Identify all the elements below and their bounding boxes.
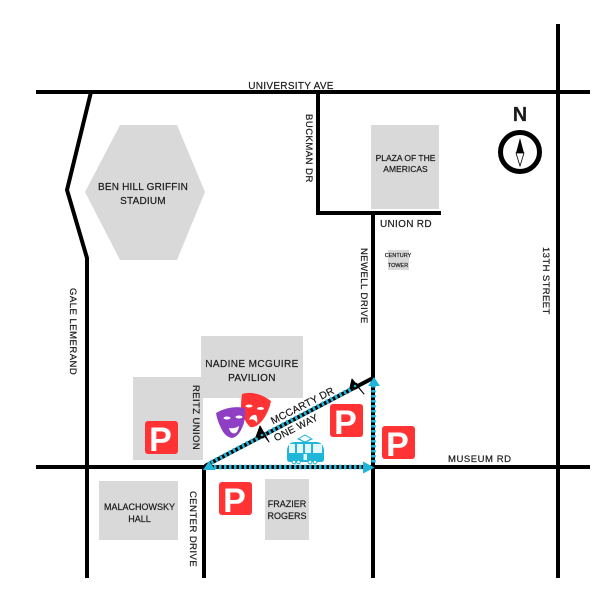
road labels	[67, 81, 551, 567]
red mask	[241, 393, 271, 427]
icon: compass: N	[513, 104, 527, 126]
icon: parking Reitz	[145, 421, 178, 459]
icon: parking Reitz: P	[149, 421, 172, 459]
icon: trolley	[287, 435, 324, 464]
road labels: 13TH STREET	[540, 247, 551, 315]
icon: theatre masks	[216, 393, 271, 438]
building: Century Tower: CENTURY	[385, 253, 412, 259]
icon: parking east: P	[386, 426, 409, 464]
building: Frazier Rogers	[265, 479, 309, 540]
road labels: CENTER DRIVE	[187, 491, 198, 567]
building: Nadine McGuire Pavilion: PAVILION	[228, 373, 276, 384]
shuttle route: dotted blue triangle	[211, 385, 374, 467]
icon: parking center: P	[334, 404, 357, 442]
icon: compass	[500, 104, 540, 172]
icon: parking east	[382, 426, 415, 464]
road labels: NEWELL DRIVE	[358, 248, 369, 324]
building: Century Tower	[385, 250, 412, 270]
road labels: MUSEUM RD	[448, 454, 512, 465]
building: Plaza of the Americas: PLAZA OF THE	[376, 153, 436, 163]
icon: parking south: P	[223, 482, 246, 520]
building: Century Tower: TOWER	[388, 263, 408, 269]
building: Plaza of the Americas: AMERICAS	[383, 164, 428, 174]
building: Plaza of the Americas	[371, 125, 439, 209]
building: Reitz Union: REITZ UNION	[190, 385, 201, 450]
road labels: BUCKMAN DR	[303, 114, 314, 183]
building: Nadine McGuire Pavilion: NADINE MCGUIRE	[205, 359, 299, 370]
road labels: ONE WAY	[272, 412, 320, 444]
purple mask	[216, 407, 245, 438]
road labels: UNIVERSITY AVE	[248, 81, 334, 92]
road labels: GALE LEMERAND	[67, 288, 78, 375]
route arrowheads	[203, 377, 380, 474]
building: Malachowsky Hall: MALACHOWSKY	[104, 502, 175, 512]
road labels: UNION RD	[380, 219, 432, 230]
building: Ben Hill Griffin Stadium: STADIUM	[120, 196, 166, 207]
one-way direction arrows	[256, 379, 364, 442]
building: Reitz Union	[133, 377, 203, 460]
upper arrow	[350, 379, 364, 394]
icon: parking center	[330, 404, 363, 442]
building: Malachowsky Hall	[99, 481, 178, 540]
building: Frazier Rogers: ROGERS	[267, 511, 307, 521]
lower arrow	[256, 426, 269, 442]
building: Ben Hill Griffin Stadium	[85, 125, 205, 260]
road labels: MCCARTY DR	[269, 386, 336, 427]
building: Ben Hill Griffin Stadium: BEN HILL GRIFFIN	[98, 182, 188, 193]
building: Nadine McGuire Pavilion	[201, 336, 303, 398]
building: Malachowsky Hall: HALL	[128, 514, 151, 524]
building: Frazier Rogers: FRAZIER	[268, 499, 307, 509]
icon: parking south	[219, 482, 252, 520]
